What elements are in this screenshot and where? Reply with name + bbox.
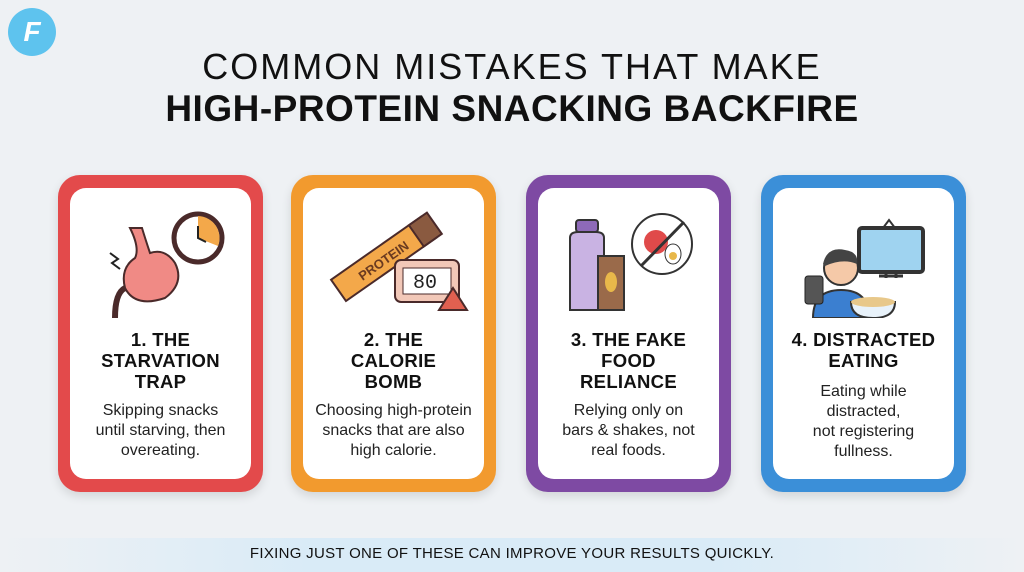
logo: F <box>23 16 41 47</box>
panel: fake food reliance <box>526 175 731 492</box>
text <box>813 383 914 460</box>
heading <box>792 329 935 371</box>
text: bars & shakes, not <box>562 422 695 439</box>
text: Skipping snacks <box>103 402 218 419</box>
title: COMMON MISTAKES THAT MAKE <box>202 46 822 87</box>
logo <box>8 8 56 56</box>
text: Relying only on <box>574 402 683 419</box>
title <box>165 46 859 129</box>
heading <box>571 329 686 392</box>
heading: EATING <box>828 350 899 371</box>
icon: protein bar and scale: PROTEIN <box>356 238 412 283</box>
heading: TRAP <box>135 371 186 392</box>
heading: 1. THE <box>131 329 190 350</box>
heading: STARVATION <box>101 350 220 371</box>
icon: stomach and clock <box>110 212 224 318</box>
text: overeating. <box>121 442 200 459</box>
panel: starvation trap <box>58 175 263 492</box>
heading <box>351 329 436 392</box>
heading: CALORIE <box>351 350 436 371</box>
text: Eating while <box>820 383 907 400</box>
icon: person with phone and TV <box>804 218 925 318</box>
panel: distracted eating <box>761 175 966 492</box>
title: HIGH-PROTEIN SNACKING BACKFIRE <box>165 88 859 129</box>
text: Choosing high-protein <box>315 402 472 419</box>
heading: 2. THE <box>364 329 423 350</box>
heading: RELIANCE <box>580 371 677 392</box>
text: high calorie. <box>350 442 437 459</box>
footer banner <box>0 538 1024 572</box>
heading: FOOD <box>601 350 656 371</box>
text <box>562 402 695 459</box>
heading <box>101 329 220 392</box>
footer banner: FIXING JUST ONE OF THESE CAN IMPROVE YOUR RESULTS QUICKLY. <box>250 545 774 562</box>
text: until starving, then <box>96 422 225 439</box>
icon: protein bar and scale: 80 <box>413 272 437 295</box>
text <box>315 402 472 459</box>
text: fullness. <box>834 443 893 460</box>
text: snacks that are also <box>322 422 465 439</box>
text: not registering <box>813 423 914 440</box>
text: real foods. <box>591 442 666 459</box>
heading: 4. DISTRACTED <box>792 329 935 350</box>
heading: 3. THE FAKE <box>571 329 686 350</box>
icon: protein bar and scale <box>330 211 469 311</box>
text: distracted, <box>827 403 900 420</box>
heading: BOMB <box>365 371 422 392</box>
panel: calorie bomb <box>291 175 496 492</box>
icon: bottle, bar, no whole foods <box>569 213 693 311</box>
text <box>96 402 225 459</box>
